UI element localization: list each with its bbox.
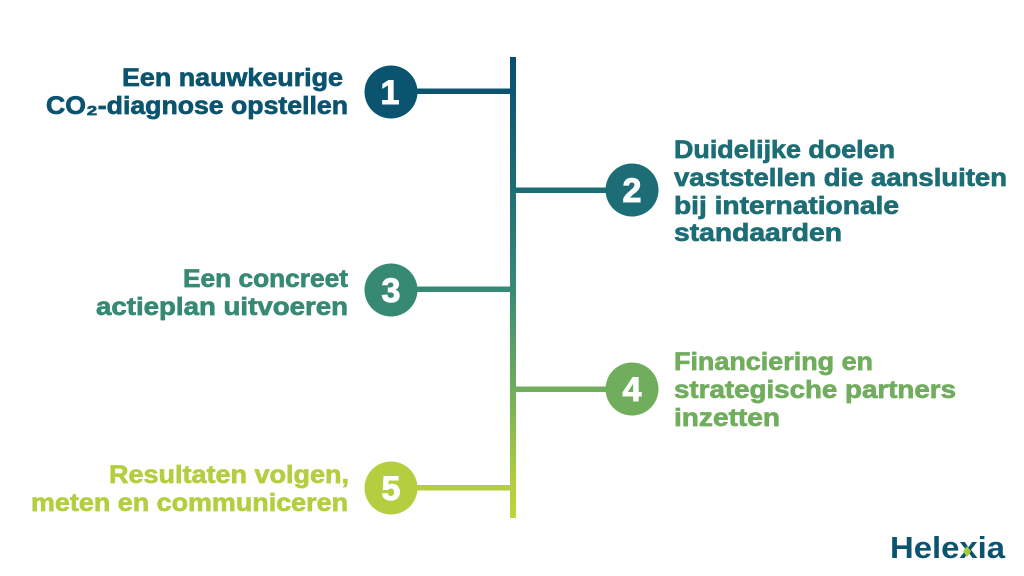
step 1 [46,64,511,120]
text 3: Een concreet [183,265,349,293]
circle 5 [364,462,418,514]
connector 5 [414,485,511,490]
text 4: Financiering en [674,348,873,376]
text 5: meten en communiceren [31,489,348,517]
connector 2 [515,188,609,193]
connector 4 [515,386,609,392]
connector 3 [414,286,511,292]
text 4: inzetten [674,404,780,432]
step 4 [515,348,956,432]
text 5 [31,461,349,517]
connector 1 [414,88,511,94]
number 5: 5 [382,470,400,508]
circle 2 [606,164,658,216]
text 4 [674,348,956,432]
text 1 [46,64,348,120]
text 2: vaststellen die aansluiten [674,164,1007,192]
number 4: 4 [623,371,642,409]
text 2 [674,136,1007,247]
circle 3 [364,264,418,316]
text 3 [96,265,349,321]
step 5 [31,461,511,517]
text 2: Duidelijke doelen [674,136,895,164]
text 2: bij internationale [674,192,899,220]
text 1: CO₂-diagnose opstellen [46,92,348,120]
circle 1 [364,66,418,118]
vertical timeline [510,57,516,518]
text 1: Een nauwkeurige [122,64,343,92]
number 2: 2 [623,172,641,210]
text 5: Resultaten volgen, [109,461,349,489]
text 4: strategische partners [674,376,956,404]
number 1: 1 [381,74,399,112]
logo: Helexia: Helexia [890,530,1006,565]
text 3: actieplan uitvoeren [96,293,348,321]
text 2: standaarden [674,219,842,247]
logo accent: green x centre [963,546,971,557]
circle 4 [606,362,658,416]
step 3 [96,264,511,321]
number 3: 3 [382,272,400,310]
step 2 [515,136,1007,247]
